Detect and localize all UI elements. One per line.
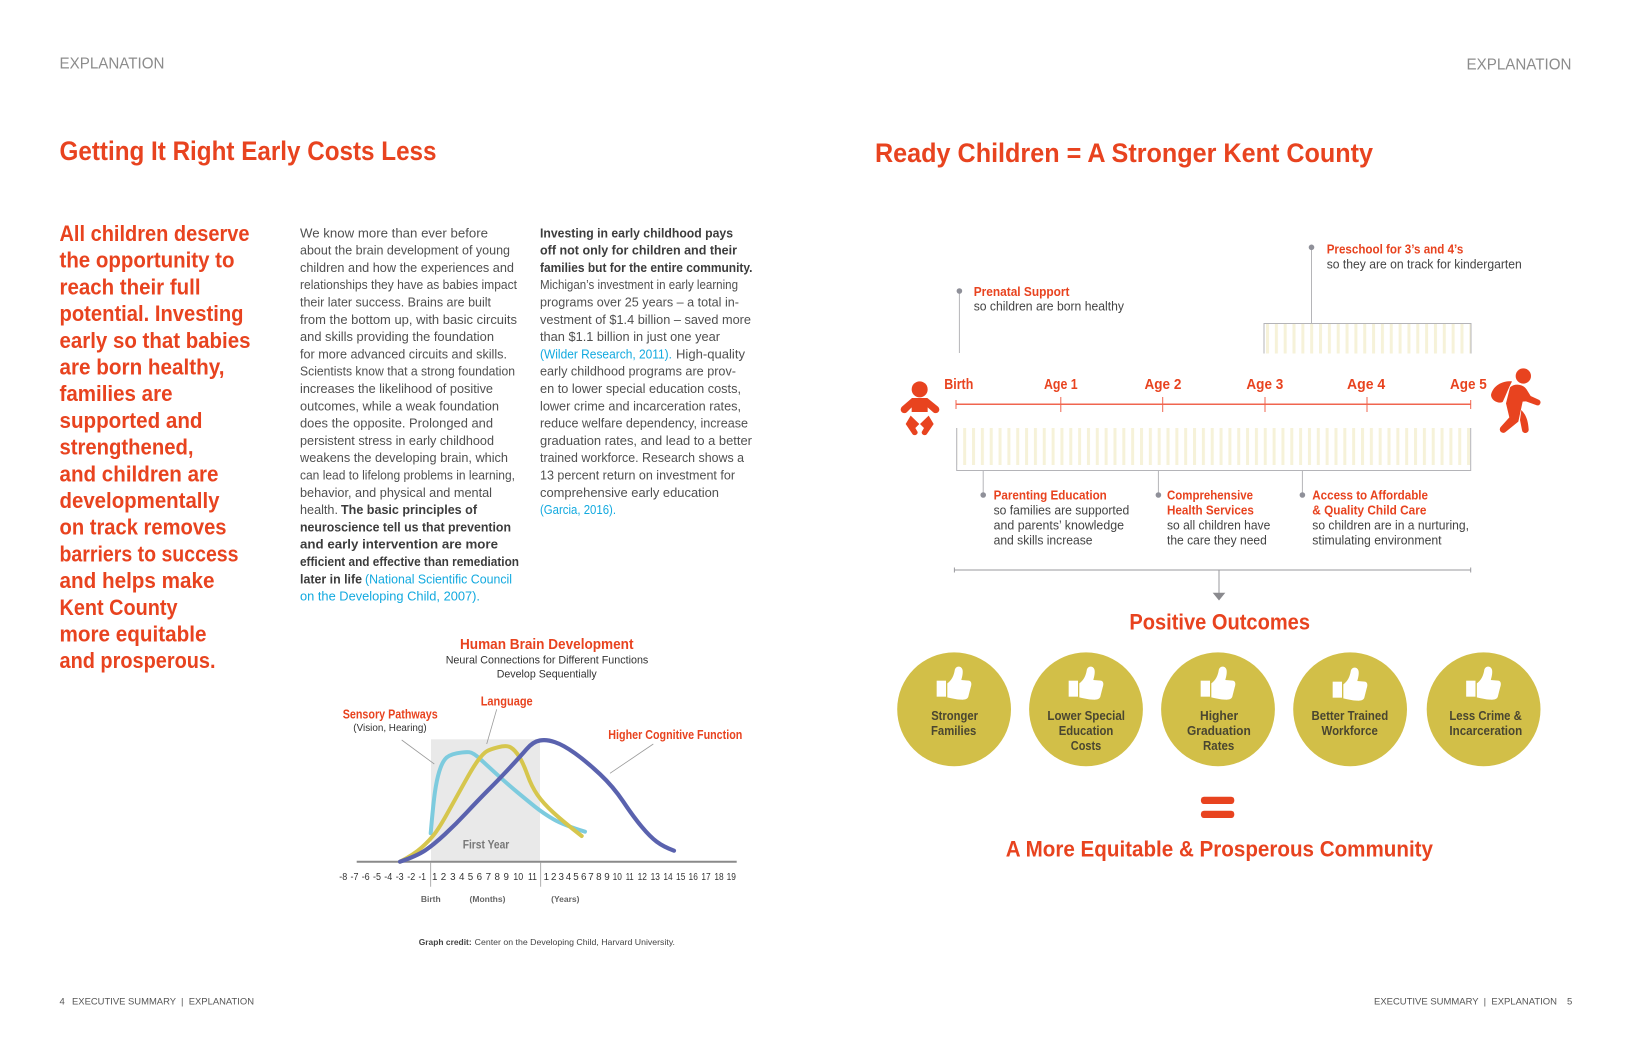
section header: right page: EXPLANATION bbox=[1466, 56, 1572, 73]
footer: left page: EXECUTIVE SUMMARY | EXPLANATION bbox=[72, 996, 254, 1008]
axis tick labels bbox=[339, 872, 736, 883]
arrow: programs lead to outcomes bbox=[954, 568, 1471, 600]
body text: column 2: early childhood programs are prov- bbox=[540, 364, 736, 379]
body text: column 2: vestment of $1.4 billion – saved more bbox=[540, 312, 751, 327]
callout: comprehensive health services: Comprehensive bbox=[1167, 488, 1253, 502]
callout: parenting education: and skills increase bbox=[994, 533, 1093, 547]
first year band bbox=[431, 739, 540, 861]
callout: affordable quality child care: Access to Affordable bbox=[1312, 488, 1428, 502]
lead statement bbox=[60, 221, 250, 673]
axis tick labels: 16 bbox=[689, 872, 698, 883]
body text: column 1: behavior, and physical and mental bbox=[300, 485, 492, 500]
lead statement: are born healthy, bbox=[60, 354, 224, 380]
series label: sensory pathways bbox=[343, 708, 438, 734]
axis tick labels: 8 bbox=[596, 872, 602, 883]
lead statement: potential. Investing bbox=[60, 301, 244, 326]
lead statement: Kent County bbox=[60, 595, 178, 620]
heading: positive outcomes: Positive Outcomes bbox=[1129, 609, 1310, 634]
chart title: Human Brain Development bbox=[460, 637, 634, 653]
lead statement: developmentally bbox=[60, 488, 220, 513]
axis tick labels: 10 bbox=[513, 872, 524, 883]
outcome: lower special education costs: Costs bbox=[1071, 739, 1101, 753]
axis captions: (Years) bbox=[551, 894, 580, 904]
outcome: higher graduation rates: Rates bbox=[1203, 739, 1234, 753]
axis tick labels: -1 bbox=[418, 872, 426, 883]
outcome: lower special education costs: Lower Special bbox=[1047, 709, 1125, 723]
callout: comprehensive health services bbox=[1156, 470, 1270, 547]
series label: sensory pathways: (Vision, Hearing) bbox=[353, 723, 427, 734]
timeline: birth to age 5 bbox=[944, 377, 1487, 412]
lead statement: reach their full bbox=[60, 274, 200, 299]
axis tick labels: -6 bbox=[362, 872, 370, 883]
lead statement: on track removes bbox=[60, 515, 226, 540]
title: right page: Ready Children = A Stronger Kent County bbox=[875, 138, 1373, 168]
body text: column 1: (National Scientific Council bbox=[365, 571, 512, 586]
axis tick labels: 11 bbox=[528, 872, 537, 883]
body text: column 1: and skills providing the foundation bbox=[300, 329, 494, 344]
icon: equals sign bbox=[1201, 797, 1234, 818]
callout: affordable quality child care: & Quality Child Care bbox=[1312, 503, 1426, 517]
lead statement: strengthened, bbox=[60, 435, 194, 460]
series label: language: Language bbox=[481, 695, 533, 709]
callout: affordable quality child care bbox=[1300, 470, 1469, 547]
callout: comprehensive health services: so all children have bbox=[1167, 518, 1270, 532]
curve: sensory pathways bbox=[431, 752, 585, 833]
icon: child walking with backpack bbox=[1491, 368, 1540, 433]
outcome: higher graduation rates bbox=[1161, 652, 1275, 766]
body text: column 1: from the bottom up, with basic circuits bbox=[300, 312, 517, 327]
lead statement: early so that babies bbox=[60, 328, 250, 353]
lead statement: more equitable bbox=[60, 622, 206, 646]
axis tick labels: 11 bbox=[626, 872, 634, 883]
curve: language bbox=[400, 746, 582, 862]
series label: higher cognitive function: Higher Cognitive Function bbox=[608, 728, 742, 742]
axis tick labels: 5 bbox=[468, 872, 474, 883]
body text: column 1: about the brain development of young bbox=[300, 243, 510, 258]
axis tick labels: 6 bbox=[581, 872, 587, 883]
icon: thumbs up bbox=[937, 667, 971, 700]
outcome: stronger families: Families bbox=[931, 724, 976, 738]
axis tick labels: -4 bbox=[384, 872, 393, 883]
axis tick labels: 13 bbox=[651, 872, 660, 883]
axis tick labels: 3 bbox=[558, 872, 564, 883]
body text: column 2: programs over 25 years – a total in- bbox=[540, 294, 739, 310]
body text: column 2: families but for the entire community. bbox=[540, 260, 752, 275]
axis tick labels: -7 bbox=[350, 872, 358, 883]
axis tick labels: 7 bbox=[486, 872, 491, 883]
chart title: Develop Sequentially bbox=[497, 668, 597, 680]
axis tick labels: 4 bbox=[459, 872, 465, 883]
body text: column 1: persistent stress in early childhood bbox=[300, 433, 494, 448]
axis tick labels: -8 bbox=[339, 872, 348, 883]
band label: first year: First Year bbox=[463, 838, 510, 852]
body text: column 1: health. bbox=[300, 502, 338, 517]
section header: left page: EXPLANATION bbox=[60, 55, 164, 72]
axis tick labels: 8 bbox=[494, 872, 500, 883]
body text: column 2: (Wilder Research, 2011). bbox=[540, 346, 672, 361]
body text: column 2: High-quality bbox=[676, 346, 745, 361]
body text: column 1: children and how the experiences and bbox=[300, 260, 514, 275]
lead statement: and children are bbox=[60, 461, 218, 486]
title: left page: Getting It Right Early Costs Less bbox=[60, 136, 436, 166]
body text: column 2: Investing in early childhood pays bbox=[540, 225, 733, 240]
body text: column 2: graduation rates, and lead to a better bbox=[540, 433, 753, 448]
outcome: better trained workforce: Workforce bbox=[1322, 724, 1378, 738]
callout: preschool: Preschool for 3’s and 4’s bbox=[1327, 243, 1463, 257]
chart title bbox=[446, 637, 649, 680]
lead statement: and prosperous. bbox=[60, 648, 216, 673]
callout: prenatal support: Prenatal Support bbox=[974, 285, 1070, 299]
outcome: less crime and incarceration: Incarceration bbox=[1449, 724, 1522, 738]
callout: comprehensive health services: the care they need bbox=[1167, 533, 1267, 547]
axis tick labels: 2 bbox=[441, 872, 446, 883]
outcome: lower special education costs bbox=[1029, 652, 1143, 766]
axis tick labels: 1 bbox=[432, 872, 437, 883]
body text: column 1: outcomes, while a weak foundation bbox=[300, 398, 499, 413]
axis tick labels: 17 bbox=[701, 872, 711, 883]
axis captions: Birth bbox=[421, 894, 441, 904]
icon: thumbs up bbox=[1201, 667, 1235, 700]
axis tick labels: 12 bbox=[638, 872, 647, 883]
body text: column 1: on the Developing Child, 2007). bbox=[300, 589, 480, 604]
body text: column 1: relationships they have as babies impact bbox=[300, 277, 517, 292]
axis tick labels: 10 bbox=[613, 872, 622, 883]
body text: column 1: their later success. Brains are built bbox=[300, 294, 491, 310]
axis tick labels: -2 bbox=[407, 872, 415, 883]
lead statement: families are bbox=[60, 381, 172, 406]
callout: parenting education: so families are supported bbox=[994, 503, 1129, 517]
axis tick labels: 5 bbox=[573, 872, 579, 883]
body text: column 1 bbox=[299, 225, 519, 604]
outcome: less crime and incarceration: Less Crime & bbox=[1449, 709, 1522, 723]
span box: birth to age 5 programs bbox=[957, 428, 1471, 470]
axis tick labels: 3 bbox=[450, 872, 456, 883]
outcome: stronger families: Stronger bbox=[931, 709, 978, 723]
icon: baby bbox=[901, 381, 939, 435]
body text: column 1: weakens the developing brain, which bbox=[299, 450, 508, 465]
body text: column 2: en to lower special education costs, bbox=[540, 381, 741, 396]
body text: column 2: lower crime and incarceration rates, bbox=[540, 398, 741, 413]
axis tick labels: 14 bbox=[663, 872, 673, 883]
icon: thumbs up bbox=[1466, 667, 1501, 700]
timeline: birth to age 5: Age 3 bbox=[1246, 377, 1283, 393]
timeline: birth to age 5: Birth bbox=[944, 377, 973, 393]
outcome: lower special education costs: Education bbox=[1059, 724, 1113, 738]
axis bbox=[357, 862, 737, 887]
timeline: birth to age 5: Age 2 bbox=[1144, 377, 1181, 393]
icon: thumbs up bbox=[1333, 668, 1367, 701]
axis tick labels: 2 bbox=[551, 872, 556, 883]
body text: column 2: 13 percent return on investment for bbox=[540, 468, 736, 482]
axis tick labels: -5 bbox=[373, 872, 381, 883]
lead statement: and helps make bbox=[60, 568, 214, 593]
span box: preschool years bbox=[1264, 324, 1471, 354]
footer: right page: EXECUTIVE SUMMARY | EXPLANATION bbox=[1374, 996, 1557, 1008]
callout: comprehensive health services: Health Services bbox=[1167, 503, 1254, 517]
body text: column 2 bbox=[540, 225, 753, 517]
graph credit: Center on the Developing Child, Harvard University. bbox=[475, 937, 675, 947]
axis tick labels: 9 bbox=[604, 872, 610, 883]
axis tick labels: -3 bbox=[396, 872, 404, 883]
callout: parenting education: and parents’ knowledge bbox=[994, 518, 1124, 532]
timeline: birth to age 5: Age 5 bbox=[1450, 377, 1487, 393]
body text: column 1: can lead to lifelong problems in learning, bbox=[300, 468, 515, 482]
callout: preschool bbox=[1309, 243, 1522, 323]
body text: column 1: later in life bbox=[300, 571, 362, 586]
lead statement: barriers to success bbox=[60, 541, 238, 566]
callout: affordable quality child care: stimulating environment bbox=[1312, 533, 1442, 547]
outcome: higher graduation rates: Higher bbox=[1200, 709, 1238, 723]
outcome: stronger families bbox=[897, 652, 1011, 766]
body text: column 2: off not only for children and their bbox=[540, 243, 737, 258]
body text: column 2: reduce welfare dependency, increase bbox=[540, 416, 748, 431]
leader lines bbox=[402, 709, 653, 773]
body text: column 1: We know more than ever before bbox=[300, 225, 488, 240]
graph credit: Graph credit: bbox=[419, 937, 472, 947]
series label: sensory pathways: Sensory Pathways bbox=[343, 708, 438, 722]
body text: column 1: efficient and effective than remediation bbox=[300, 554, 519, 569]
outcome: higher graduation rates: Graduation bbox=[1187, 724, 1251, 738]
callout: parenting education bbox=[980, 470, 1129, 547]
timeline: birth to age 5: Age 4 bbox=[1347, 377, 1385, 393]
axis tick labels: 1 bbox=[544, 872, 549, 883]
axis tick labels: 15 bbox=[676, 872, 686, 883]
footer: right page: 5 bbox=[1567, 996, 1572, 1008]
timeline: birth to age 5: Age 1 bbox=[1044, 377, 1078, 393]
body text: column 1: The basic principles of bbox=[341, 502, 478, 517]
callout: prenatal support bbox=[957, 285, 1125, 353]
axis tick labels: 6 bbox=[477, 872, 483, 883]
body text: column 1: and early intervention are more bbox=[300, 537, 498, 552]
lead statement: the opportunity to bbox=[60, 248, 234, 273]
callout: prenatal support: so children are born healthy bbox=[974, 300, 1125, 314]
outcome: better trained workforce bbox=[1293, 652, 1407, 766]
conclusion heading: A More Equitable & Prosperous Community bbox=[1006, 837, 1434, 862]
body text: column 1: increases the likelihood of positive bbox=[300, 381, 493, 396]
outcome: better trained workforce: Better Trained bbox=[1312, 709, 1388, 723]
footer: left page: 4 bbox=[60, 996, 65, 1008]
body text: column 2: Michigan’s investment in early learning bbox=[540, 277, 738, 292]
axis tick labels: 9 bbox=[503, 872, 509, 883]
axis tick labels: 18 bbox=[714, 872, 724, 883]
callout: affordable quality child care: so children are in a nurturing, bbox=[1312, 518, 1469, 532]
callout: preschool: so they are on track for kindergarten bbox=[1327, 258, 1522, 272]
lead statement: All children deserve bbox=[60, 221, 250, 246]
outcome: less crime and incarceration bbox=[1427, 652, 1540, 766]
body text: column 1: neuroscience tell us that prevention bbox=[300, 519, 511, 534]
body text: column 2: comprehensive early education bbox=[540, 485, 719, 500]
curve: higher cognitive function bbox=[400, 740, 674, 862]
icon: thumbs up bbox=[1069, 667, 1103, 700]
chart: human brain development bbox=[339, 637, 742, 947]
axis captions: (Months) bbox=[470, 894, 506, 904]
axis tick labels: 4 bbox=[566, 872, 572, 883]
body text: column 2: than $1.1 billion in just one year bbox=[540, 329, 721, 344]
lead statement: supported and bbox=[60, 408, 202, 433]
body text: column 2: trained workforce. Research shows a bbox=[540, 450, 745, 465]
axis tick labels: 7 bbox=[588, 872, 594, 883]
body text: column 1: for more advanced circuits and skills. bbox=[300, 346, 507, 361]
callout: parenting education: Parenting Education bbox=[994, 488, 1107, 502]
chart title: Neural Connections for Different Functions bbox=[446, 654, 649, 666]
body text: column 1: does the opposite. Prolonged and bbox=[300, 416, 493, 431]
axis captions bbox=[421, 894, 580, 904]
body text: column 1: Scientists know that a strong foundation bbox=[300, 364, 515, 379]
axis tick labels: 19 bbox=[727, 872, 736, 883]
body text: column 2: (Garcia, 2016). bbox=[540, 502, 616, 517]
